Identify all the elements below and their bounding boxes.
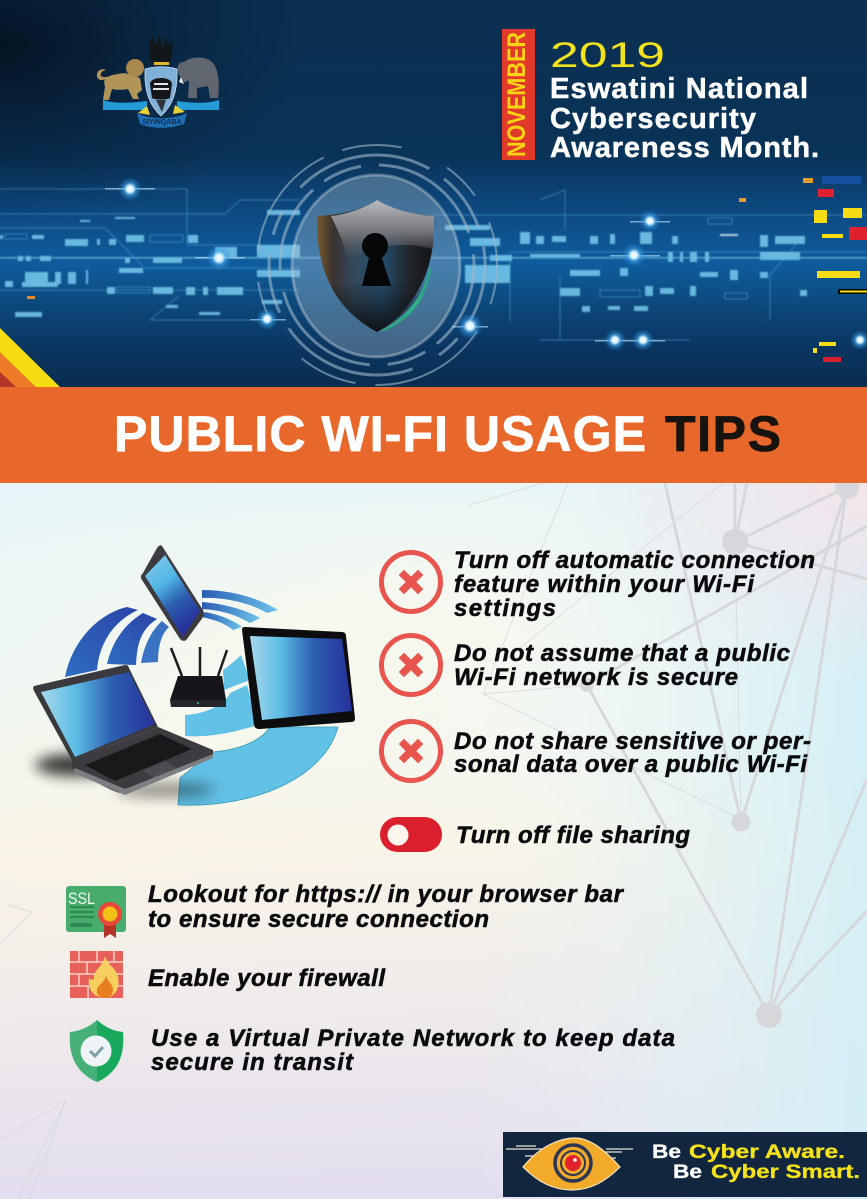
corner stripes [0,328,60,387]
illustration: connected devices and wi-fi [33,545,355,805]
light flares [105,177,867,351]
tip: public wi-fi not secure [454,640,790,691]
footer badge: be cyber aware [503,1132,867,1197]
icon: laptop [33,665,215,797]
title: public wi-fi usage tips: PUBLIC WI-FI USAGE [114,406,646,462]
gold points [138,106,150,115]
heading: campaign title [550,73,819,164]
slogan text: Cyber Smart. [711,1162,860,1183]
slogan text: Be [652,1142,681,1163]
elephant [178,58,219,98]
heading: 2019: 2019 [550,36,665,75]
circuit data pattern [0,189,867,340]
panel: header banner [0,0,867,388]
list: warning tips [380,547,815,852]
icon: cross 1 [382,552,440,612]
tip: public wi-fi not secure: Wi-Fi network is secure [454,664,738,691]
list: protective tips [66,881,675,1082]
icon: wi-fi router [170,647,227,707]
tip: sensitive data [454,728,811,778]
heading: campaign title: Awareness Month. [550,132,819,164]
tip: sensitive data: sonal data over a public Wi-Fi [454,751,808,778]
tip: firewall: Enable your firewall [148,965,386,992]
logo: coat of arms: SIYINQABA [143,119,181,126]
lion [97,59,144,100]
tip: automatic connection: settings [454,595,556,622]
heading: campaign title: Cybersecurity [550,103,756,135]
slogan text: Cyber Aware. [689,1142,845,1163]
title: public wi-fi usage tips: TIPS [665,406,781,462]
icon: security shield with keyhole [317,200,434,332]
wi-fi arcs [65,590,338,805]
coloured data blocks [27,176,867,362]
panel: body background [0,475,867,1199]
icon: smartphone [141,545,204,641]
tip: automatic connection: Turn off automatic connection [454,547,815,574]
tip: file sharing: Turn off file sharing [456,822,690,849]
tip: automatic connection: feature within your Wi-Fi [454,571,755,598]
icon: ssl certificate: SSL [68,889,95,908]
ribbon [103,100,147,110]
tip: vpn [151,1025,675,1076]
glow rings [257,145,497,385]
feather crest [149,34,172,62]
icon: cross 2 [382,636,440,694]
tip: sensitive data: Do not share sensitive or per- [454,728,811,755]
NOVEMBER tag: NOVEMBER [503,32,531,157]
icon: ssl certificate [66,886,126,938]
tip: public wi-fi not secure: Do not assume that a public [454,640,790,667]
icon: vpn shield [70,1020,123,1082]
motto scroll [137,113,187,128]
tip: https: to ensure secure connection [148,906,489,933]
tip: https [148,881,625,933]
tip: vpn: secure in transit [151,1049,354,1076]
slogan text [652,1142,860,1183]
icon: cyber eye [506,1138,633,1190]
tip: vpn: Use a Virtual Private Network to keep data [151,1025,675,1052]
heading: campaign title: Eswatini National [550,73,808,105]
shield halo [292,175,460,357]
shield [145,67,177,116]
icon: toggle switch [380,817,442,852]
icon: firewall [70,951,123,998]
logo: coat of arms [97,34,219,128]
title bar [0,387,867,483]
icon: cross 3 [382,722,440,780]
icon: tablet [242,627,355,729]
tip: https: Lookout for https:// in your browser bar [148,881,625,908]
icon: keyhole [362,233,391,286]
slogan text: Be [673,1162,702,1183]
tip: automatic connection [454,547,815,622]
